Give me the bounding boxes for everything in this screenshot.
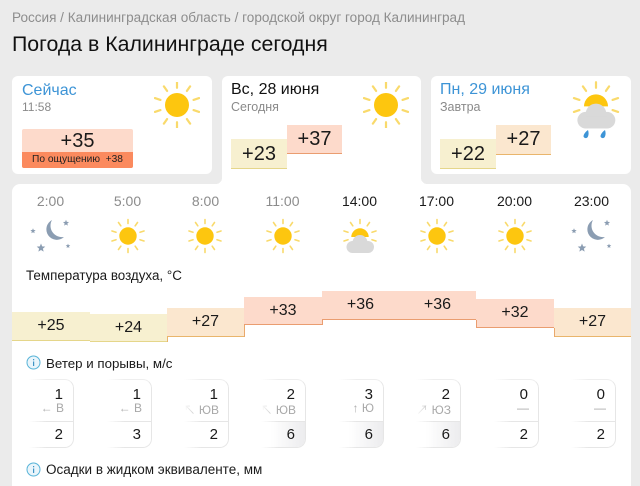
icon: partly cloudy	[344, 220, 376, 253]
panel: now	[12, 76, 212, 174]
wind 14:00: 3	[365, 386, 373, 403]
icon: info	[26, 462, 40, 476]
wind 14:00	[345, 379, 384, 448]
+25	[12, 312, 90, 341]
+36	[322, 291, 399, 320]
+25: +25	[37, 317, 65, 334]
wind 23:00	[577, 379, 616, 448]
current temperature	[22, 129, 133, 168]
now time: 11:58	[22, 100, 51, 114]
now heading: Сейчас	[22, 82, 77, 99]
wind 11:00: ↖ ЮВ	[261, 403, 296, 417]
+24	[90, 314, 167, 342]
icon: partly cloudy with rain	[572, 81, 620, 138]
wind 5:00: ← В	[119, 401, 142, 415]
wind 20:00: 2	[520, 426, 528, 443]
low temperature: +23	[242, 143, 276, 165]
panel: tomorrow	[431, 76, 631, 174]
wind 14:00: ↑ Ю	[353, 401, 374, 415]
icon: night	[571, 220, 611, 252]
breadcrumb: Россия / Калининградская область / городской округ город Калининград	[12, 10, 465, 25]
wind 23:00: —	[594, 401, 606, 415]
wind 11:00: 2	[287, 386, 295, 403]
hours row	[37, 193, 609, 209]
panel: today	[222, 76, 421, 186]
+36: +36	[424, 296, 451, 313]
hour 8:00: 8:00	[192, 193, 219, 209]
+33	[244, 297, 322, 325]
+27	[554, 308, 631, 337]
wind 14:00: 6	[365, 426, 373, 443]
wind 2:00: ← В	[41, 401, 64, 415]
icon: sun	[112, 220, 144, 252]
wind 5:00	[113, 379, 152, 448]
+27: +27	[192, 313, 219, 330]
+36	[399, 291, 476, 320]
+36: +36	[347, 296, 374, 313]
icon: sun	[267, 220, 299, 252]
+33: +33	[269, 302, 297, 319]
wind 2:00: 2	[55, 426, 63, 443]
precipitation heading	[26, 462, 262, 477]
low temperature	[440, 139, 496, 169]
tomorrow label: Завтра	[440, 100, 480, 114]
high temperature	[496, 125, 551, 155]
wind 11:00: 6	[287, 426, 295, 443]
feels like	[22, 152, 133, 168]
wind table	[35, 379, 616, 448]
low temperature	[231, 139, 287, 169]
+24: +24	[115, 319, 142, 336]
feels like: По ощущению +38	[32, 154, 123, 165]
+27: +27	[579, 313, 606, 330]
wind 11:00	[263, 379, 306, 448]
hour 17:00: 17:00	[419, 193, 454, 209]
hour 23:00: 23:00	[574, 193, 609, 209]
wind 2:00	[35, 379, 74, 448]
wind 17:00: 2	[442, 386, 450, 403]
temperature value: +35	[61, 130, 94, 152]
wind 5:00: 1	[133, 386, 141, 403]
wind 23:00: 0	[597, 386, 605, 403]
wind 17:00: ↗ ЮЗ	[416, 403, 451, 417]
icon: night	[30, 220, 70, 252]
+32: +32	[501, 304, 529, 321]
wind heading	[26, 356, 172, 371]
icon: sun	[499, 220, 531, 252]
today label: Сегодня	[231, 100, 279, 114]
wind 5:00: 3	[133, 426, 141, 443]
hour 11:00: 11:00	[266, 193, 300, 209]
icon: sun	[189, 220, 221, 252]
low temperature: +22	[451, 143, 485, 165]
wind 17:00: 6	[442, 426, 450, 443]
title: Погода в Калининграде сегодня	[12, 32, 328, 56]
temperature strip	[12, 291, 631, 342]
hour 2:00: 2:00	[37, 193, 64, 209]
precipitation label: Осадки в жидком эквиваленте, мм	[46, 462, 262, 477]
wind label: Ветер и порывы, м/с	[46, 356, 172, 371]
icons row	[30, 218, 612, 254]
air temperature heading: Температура воздуха, °C	[26, 268, 182, 283]
wind 20:00	[500, 379, 539, 448]
icon: sun	[154, 82, 200, 128]
+32	[476, 299, 554, 328]
wind 20:00: —	[517, 401, 529, 415]
hour 20:00: 20:00	[497, 193, 532, 209]
wind 8:00: 1	[210, 386, 218, 403]
hour 5:00: 5:00	[114, 193, 141, 209]
high temperature: +27	[507, 128, 540, 150]
wind 8:00: ↖ ЮВ	[184, 403, 219, 417]
icon: sun	[363, 82, 409, 128]
high temperature	[287, 125, 342, 154]
icon: sun	[421, 220, 453, 252]
wind 8:00	[186, 379, 229, 448]
wind 17:00	[418, 379, 461, 448]
wind 2:00: 1	[55, 386, 63, 403]
wind 20:00: 0	[520, 386, 528, 403]
+27	[167, 308, 244, 337]
high temperature: +37	[298, 128, 331, 150]
today date: Вс, 28 июня	[231, 81, 319, 98]
tomorrow date: Пн, 29 июня	[440, 81, 530, 98]
wind 8:00: 2	[210, 426, 218, 443]
wind 23:00: 2	[597, 426, 605, 443]
icon: info	[26, 356, 40, 370]
hour 14:00: 14:00	[342, 193, 377, 209]
panel: hourly forecast	[12, 184, 631, 486]
